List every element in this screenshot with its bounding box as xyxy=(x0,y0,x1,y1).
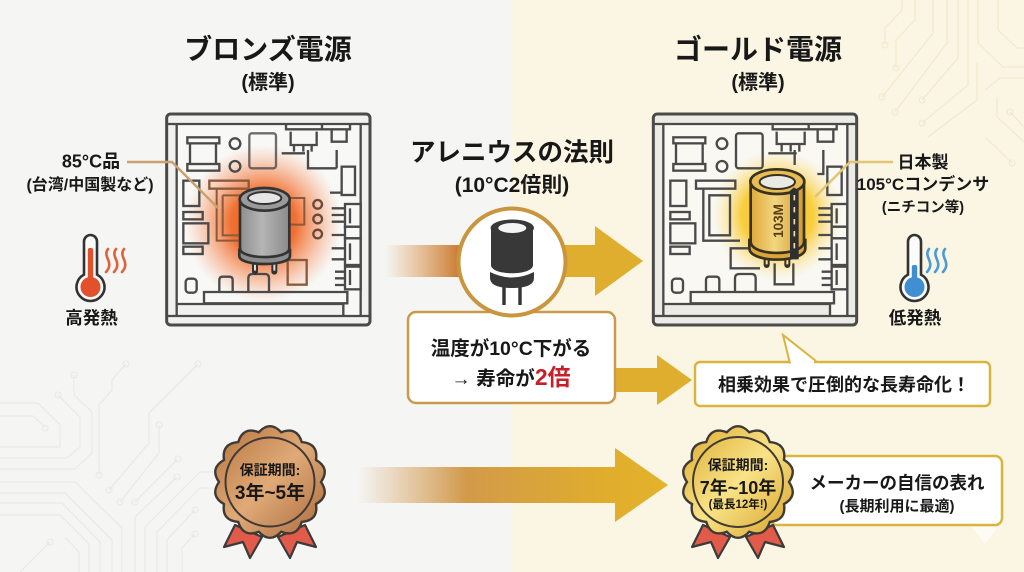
heading: Arrhenius law: アレニウスの法則 xyxy=(410,139,614,167)
text box: maker confidence: (長期利用に最適) xyxy=(840,497,954,515)
title: gold power supply: ゴールド電源 xyxy=(674,33,842,65)
text box: maker confidence xyxy=(770,456,1002,525)
badge: gold warranty: (最長12年!) xyxy=(709,497,768,511)
text box: temperature rule xyxy=(408,312,615,403)
text box: temperature rule: → 寿命が2倍 xyxy=(451,364,571,390)
arrow: incoming gradient xyxy=(385,245,465,277)
heading: Arrhenius law: (10°C2倍則) xyxy=(455,174,569,197)
panel: bronze power supply board xyxy=(167,114,370,325)
background: right half xyxy=(512,0,1024,572)
icon: gold 105C capacitor xyxy=(749,169,805,265)
title: gold power supply xyxy=(674,33,842,94)
callout: synergy xyxy=(695,335,990,406)
heat glow xyxy=(185,145,342,302)
badge: gold warranty: 保証期間: xyxy=(708,457,768,473)
title: bronze power supply xyxy=(184,33,352,94)
label: low heat: 低発熱 xyxy=(889,308,942,328)
label: high heat: 高発熱 xyxy=(65,308,118,328)
badge: gold warranty xyxy=(683,426,793,558)
badge: bronze warranty xyxy=(215,426,325,558)
label: Japanese 105C capacitor xyxy=(857,153,989,216)
label: 85C capacitor origin: (台湾/中国製など) xyxy=(26,175,154,194)
label: 85C capacitor origin xyxy=(26,152,154,194)
title: gold power supply: (標準) xyxy=(731,71,785,94)
label: Japanese 105C capacitor: 日本製 xyxy=(898,153,948,172)
icon: grey 85C capacitor xyxy=(239,188,290,272)
label: 85C capacitor origin: 85°C品 xyxy=(62,152,120,172)
badge: bronze warranty: 保証期間: xyxy=(240,462,300,478)
icon: center capacitor circle xyxy=(458,208,566,316)
watermark sparkle xyxy=(972,527,998,544)
title: bronze power supply: ブロンズ電源 xyxy=(184,33,352,65)
title: bronze power supply: (標準) xyxy=(241,71,295,94)
badge: bronze warranty: 3年~5年 xyxy=(235,481,305,504)
gold glow xyxy=(712,150,842,280)
arrow: to gold board xyxy=(560,226,643,296)
icon: hot thermometer xyxy=(76,235,125,301)
arrow: synergy xyxy=(610,355,692,405)
text box: temperature rule: 温度が10°C下がる xyxy=(431,337,591,360)
text box: maker confidence: メーカーの自信の表れ xyxy=(810,473,985,493)
label: capacitor marking 103M: 103M xyxy=(771,204,786,238)
label: Japanese 105C capacitor: 105°Cコンデンサ xyxy=(857,174,989,194)
heading: Arrhenius law xyxy=(410,139,614,197)
label: Japanese 105C capacitor: (ニチコン等) xyxy=(882,198,964,216)
callout line: 105C xyxy=(815,162,893,197)
badge: gold warranty: 7年~10年 xyxy=(700,477,776,498)
icon: cool thermometer xyxy=(901,235,946,301)
panel: gold power supply board xyxy=(653,114,857,325)
callout: synergy: 相乗効果で圧倒的な長寿命化！ xyxy=(718,374,970,395)
arrow: warranty xyxy=(358,448,668,522)
callout line: 85C xyxy=(127,162,218,208)
background: left half xyxy=(0,0,512,572)
